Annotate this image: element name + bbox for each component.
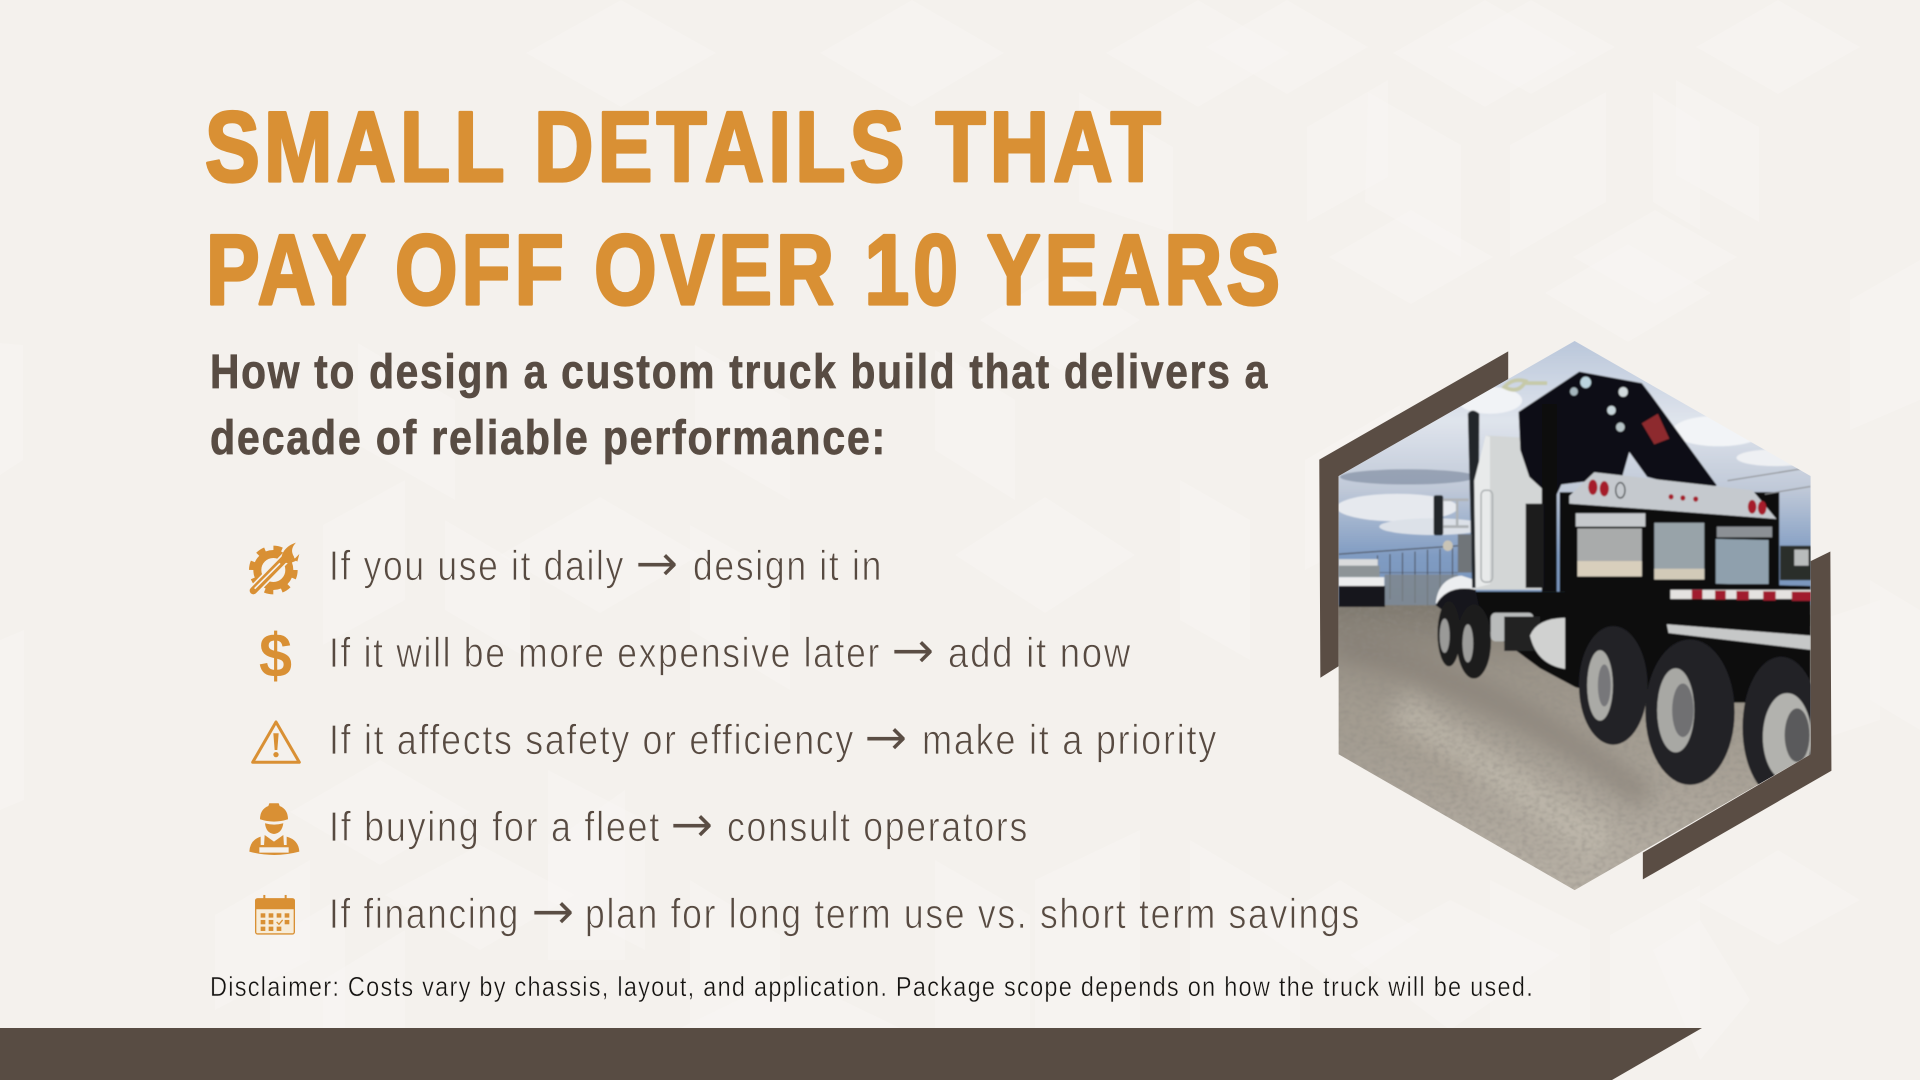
rack: [1560, 492, 1779, 592]
rule 3 text: If it affects safety or efficiency: [329, 716, 855, 763]
title: PAY OFF OVER 10 YEARS: [206, 214, 1284, 325]
rule 3 text: →: [864, 708, 908, 768]
rule 4 text: consult operators: [727, 803, 1029, 850]
deck: [1565, 580, 1811, 626]
icon: calendar: [255, 895, 295, 934]
rule 4 text: If buying for a fleet: [329, 803, 661, 850]
fuel tank and step: [1491, 613, 1534, 641]
subtitle: How to design a custom truck build that delivers a: [210, 346, 1269, 399]
title: SMALL DETAILS THAT: [205, 91, 1165, 202]
rule 2 text: add it now: [948, 629, 1132, 676]
tractor under frame: [1476, 592, 1576, 687]
rule 5 text: If financing: [329, 890, 520, 937]
hexagon photo with frame: [1319, 339, 1831, 896]
rule 4 text: →: [670, 795, 714, 855]
mirror: [1434, 495, 1443, 535]
photo: truck with crane: [1336, 339, 1820, 896]
rule 5 text: [329, 882, 1361, 942]
background yard right: [1780, 546, 1811, 580]
rule 5 text: plan for long term use vs. short term savings: [585, 890, 1361, 937]
disclaimer: Disclaimer: Costs vary by chassis, layout, and application. Package scope depends on how the truck will be used.: [210, 971, 1534, 1002]
cab: [1474, 436, 1544, 590]
chassis dark: [1565, 603, 1811, 703]
fence: [1339, 546, 1458, 607]
icon: worker with hard hat: [249, 803, 299, 855]
stack: [1468, 410, 1479, 588]
rule 5 text: →: [531, 882, 575, 942]
title: [205, 91, 1284, 325]
crane boom: [1519, 372, 1717, 500]
icon: gear and wrench: [251, 543, 299, 592]
rule 3 text: [329, 708, 1218, 768]
icon: warning triangle: [253, 722, 299, 762]
rule 1 text: →: [635, 534, 679, 594]
rule 1 text: [329, 534, 883, 594]
rear wheel 3: [1742, 656, 1811, 785]
subtitle: [210, 346, 1269, 465]
rule 3 text: make it a priority: [922, 716, 1218, 763]
list: decision rules: [249, 534, 1361, 942]
rear wheel 2: [1645, 640, 1735, 785]
bottom bar: [0, 1028, 1702, 1080]
van: [1338, 558, 1379, 567]
frame strip: bottom right: [1643, 552, 1831, 879]
rule 2 text: If it will be more expensive later: [329, 629, 881, 676]
rule 1 text: design it in: [693, 542, 883, 589]
subtitle: decade of reliable performance:: [210, 412, 887, 465]
side rail: [1667, 624, 1811, 650]
far fender/front: [1434, 574, 1476, 604]
deck reflector stripe: [1670, 590, 1811, 601]
frame strip: top left: [1319, 351, 1508, 678]
front drive wheels: [1437, 601, 1460, 666]
rule 1 text: If you use it daily: [329, 542, 625, 589]
rule 2 text: →: [891, 621, 935, 681]
rule 2 text: [329, 621, 1132, 681]
icon: dollar sign: $: [259, 622, 292, 691]
rear wheel 1: [1579, 626, 1647, 745]
rule 4 text: [329, 795, 1029, 855]
